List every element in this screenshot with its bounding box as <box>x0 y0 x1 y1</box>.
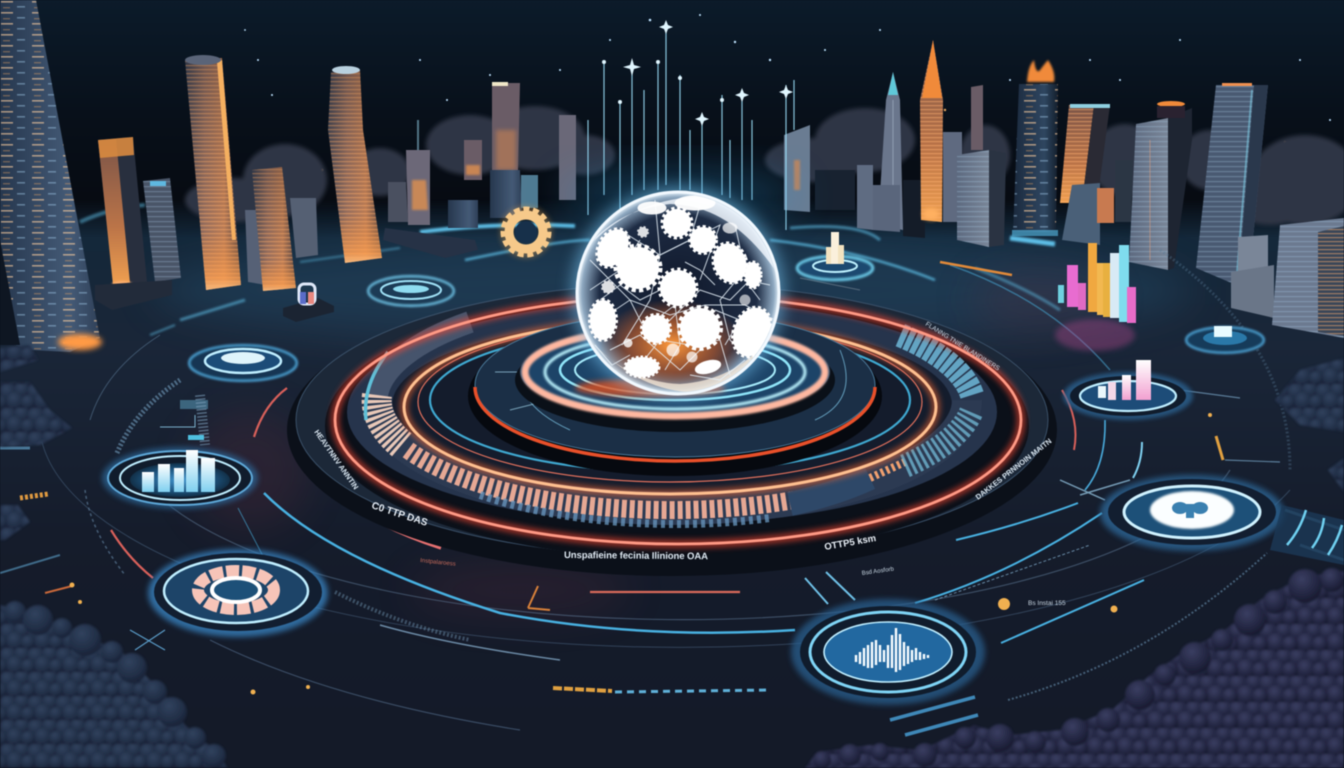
starfield <box>244 14 1331 181</box>
node: waveform pad <box>791 599 985 705</box>
tower: orange block <box>1060 104 1110 203</box>
floor sheen near horizon <box>152 235 1192 345</box>
garbled ring label: right: OTTP5 ksm <box>824 533 877 553</box>
tick band: left pink block <box>377 395 402 445</box>
tower: grey block <box>957 150 1006 247</box>
tower: orange slim 1 <box>185 55 241 290</box>
tick band: right blue block <box>790 478 870 504</box>
tick band: base strip <box>377 400 967 510</box>
globe of gears <box>572 187 784 399</box>
tick band: right cyan stripes <box>905 410 972 466</box>
node: color bar chart <box>1055 243 1136 351</box>
skyline: left district <box>0 0 576 352</box>
icon: floating gear <box>503 209 549 255</box>
data light beams <box>588 25 794 230</box>
mid platform disc <box>468 313 882 476</box>
garbled ring label: far right: DAKKES PRNNOIN MAITN <box>974 437 1053 502</box>
garbled ring label: centre: Unspafieine fecinia Ilinione OAA <box>564 550 708 562</box>
orange floor dots <box>70 413 1327 720</box>
ring: outer red <box>335 296 1021 544</box>
gears <box>590 196 777 377</box>
outer platform disc <box>287 284 1057 576</box>
node: infinity pad <box>1100 475 1284 551</box>
tower: orange slim 2 <box>328 66 382 263</box>
garbled floor label: lower right: Bs Instai 155 <box>1028 600 1066 607</box>
tick band: pink stripes <box>408 450 800 510</box>
tower: grey left <box>143 178 181 282</box>
left cyan sliver <box>365 352 388 420</box>
ring black channel <box>325 294 1029 558</box>
garbled ring label: far left: HEAVTNNV ANNTIN <box>312 428 360 491</box>
tower: tall right <box>1196 83 1268 290</box>
crack web <box>590 200 775 380</box>
tower: dark lit <box>1012 60 1058 236</box>
clouds: bottom right <box>805 568 1344 768</box>
top platform disc <box>515 326 835 432</box>
skyline: right district <box>784 40 1344 338</box>
clouds: bottom left <box>0 601 228 768</box>
floor red reflections <box>190 270 1110 615</box>
floor dashes and connectors <box>0 262 1344 735</box>
node: flower gear pad <box>148 549 328 637</box>
garbled ring label: lower: Instpalaroess <box>420 558 456 568</box>
floor circuit rings <box>40 250 1290 730</box>
node: right top pad <box>797 232 873 280</box>
node: top left pad <box>368 276 454 306</box>
tick band: orange accent <box>870 462 905 478</box>
node: bar chart pad <box>102 447 258 509</box>
node: right bar pad <box>1063 360 1193 420</box>
left data block <box>160 395 208 445</box>
tick band: blue stripes <box>480 495 770 524</box>
node: left pad <box>189 345 297 381</box>
clouds: right edge <box>1275 358 1344 492</box>
garbled ring label: left: C0 TTP DAS <box>370 500 429 529</box>
garbled ring label: upper right: FLANNG TNIE BLANDINERS <box>924 321 1001 373</box>
tower: short orange <box>98 137 147 287</box>
ring: orange inner <box>404 320 936 494</box>
panel: right data strip <box>1270 505 1344 565</box>
tower: orange spire <box>920 40 943 222</box>
tower: grey-blue block <box>1129 101 1192 270</box>
node: small right pad <box>1186 326 1264 353</box>
beam sparkles <box>602 20 793 126</box>
tower: blue spire <box>878 72 903 230</box>
clouds: left edge <box>0 345 72 540</box>
horizon cyan bands <box>80 205 1060 335</box>
tick band: upper right cyan block <box>900 335 972 395</box>
beams base glow <box>560 170 800 220</box>
tower: rounded mid <box>245 167 296 291</box>
garbled floor label: below right: Bsd Aosforb <box>861 566 895 577</box>
node: lock icon <box>283 284 334 322</box>
base plinth <box>95 280 172 310</box>
tower: far left <box>0 0 102 352</box>
tick band: upper left grey block <box>377 322 470 395</box>
background clouds <box>185 106 1344 225</box>
tower: grey foreground <box>1272 218 1344 338</box>
